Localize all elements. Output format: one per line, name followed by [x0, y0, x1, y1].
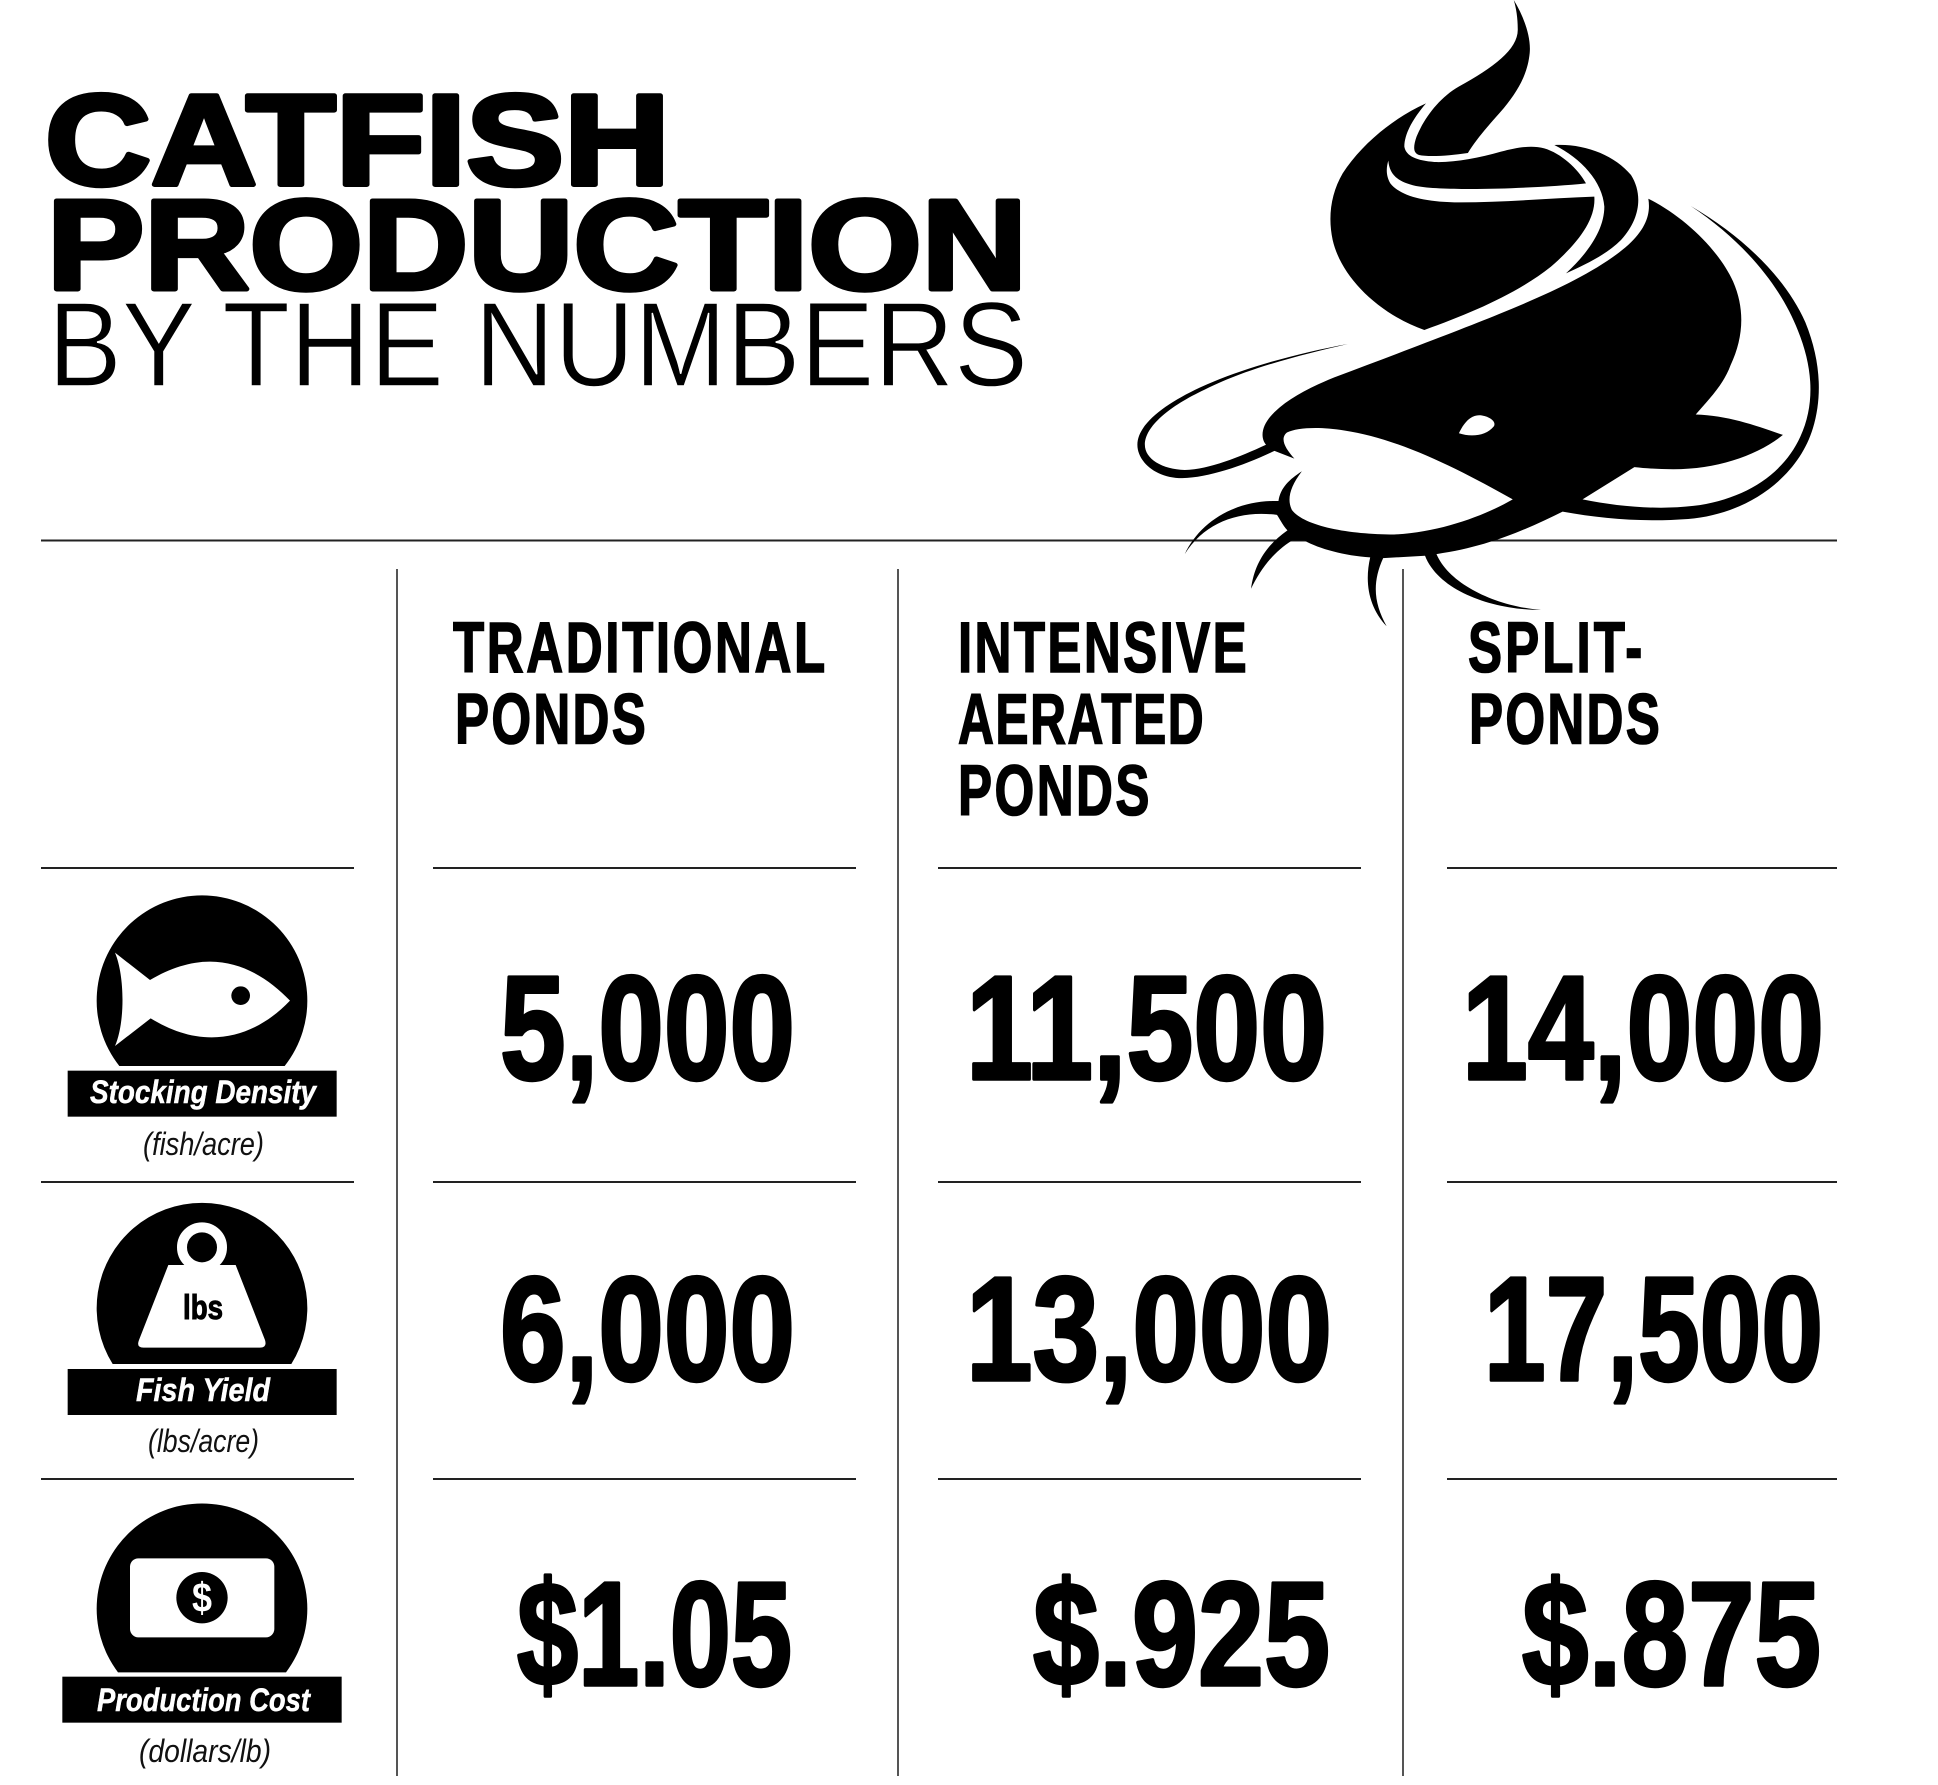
values: stocking density: [500, 946, 1824, 1111]
row: stocking density label: [68, 895, 337, 1117]
column headings: PONDS: [958, 752, 1150, 831]
values: production cost: $1.05: [517, 1552, 792, 1717]
icon: weight: [97, 1203, 307, 1364]
values: production cost: [517, 1552, 1821, 1717]
icon: banknote: [97, 1503, 307, 1672]
title: CATFISH: [45, 68, 670, 212]
column headings: PONDS: [1469, 680, 1660, 760]
values: stocking density: 14,000: [1462, 946, 1824, 1111]
unit: fish per acre: (fish/acre): [143, 1126, 264, 1162]
values: production cost: $.875: [1522, 1552, 1821, 1717]
icon text: dollar sign: $: [192, 1574, 212, 1621]
values: production cost: $.925: [1033, 1552, 1330, 1717]
values: fish yield: 13,000: [966, 1247, 1332, 1412]
values: stocking density: 11,500: [966, 946, 1327, 1111]
icon text: lbs: lbs: [183, 1289, 223, 1327]
unit: pounds per acre: (lbs/acre): [148, 1423, 259, 1459]
title: PRODUCTION: [47, 174, 1027, 317]
icon: fish: [97, 895, 307, 1066]
column headings: INTENSIVE: [958, 609, 1247, 688]
column headings: TRADITIONAL: [453, 609, 825, 688]
title: BY THE NUMBERS: [48, 276, 1028, 412]
values: stocking density: 5,000: [500, 946, 795, 1111]
column headings: PONDS: [455, 680, 646, 760]
icon: catfish illustration: [1137, 0, 1819, 626]
column headings: [453, 609, 1660, 831]
row: production cost label: [62, 1503, 342, 1723]
row: fish yield label: [68, 1203, 337, 1415]
title: [45, 68, 1028, 412]
values: fish yield: 6,000: [500, 1247, 795, 1412]
label: stocking density: Stocking Density: [90, 1074, 318, 1110]
label: production cost: Production Cost: [97, 1682, 311, 1718]
values: fish yield: 17,500: [1484, 1247, 1823, 1412]
label: fish yield: Fish Yield: [136, 1372, 271, 1408]
column headings: SPLIT-: [1468, 609, 1642, 688]
values: fish yield: [500, 1247, 1823, 1412]
column headings: AERATED: [958, 680, 1204, 759]
unit: dollars per pound: (dollars/lb): [139, 1733, 271, 1769]
